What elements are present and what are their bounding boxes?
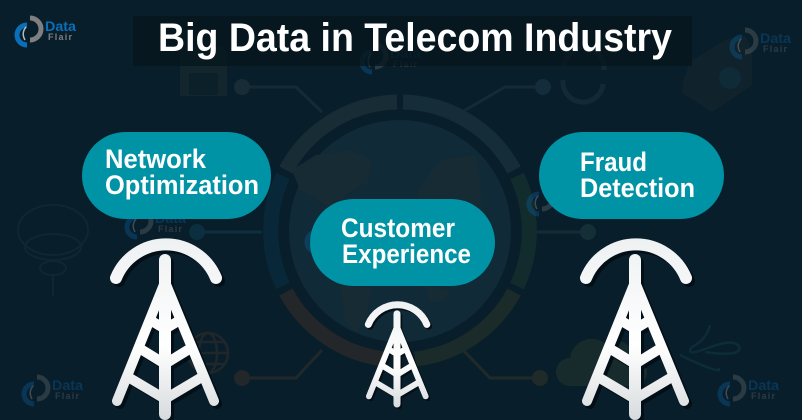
ghost icon: globe <box>188 333 228 373</box>
pill: Customer Experience <box>310 199 495 286</box>
ghost icon: telephone <box>682 35 752 112</box>
title band: Big Data in Telecom Industry <box>158 16 673 60</box>
pill: Fraud Detection: Detection <box>580 173 695 203</box>
ghost icon: floppy disk <box>180 47 227 96</box>
logo <box>17 18 76 45</box>
icon: center signal tower <box>368 305 429 406</box>
pill: Network Optimization: Optimization <box>105 170 259 200</box>
pill: Fraud Detection: Fraud <box>580 147 647 177</box>
pill: Fraud Detection <box>539 132 724 219</box>
central ring and globe <box>271 102 529 359</box>
background connector lines and nodes <box>189 79 596 386</box>
ghost icon: chandelier <box>18 205 88 296</box>
ghost icon: cable <box>680 325 739 370</box>
ghost icon: cloud <box>556 339 647 386</box>
pill: Customer Experience: Experience <box>342 239 471 269</box>
pill: Network Optimization <box>82 132 271 219</box>
icon: right signal tower <box>586 244 689 417</box>
world map silhouette <box>292 150 482 332</box>
ghost icon: refresh arrows <box>563 48 604 102</box>
pill: Network Optimization: Network <box>105 144 207 174</box>
pill: Customer Experience: Customer <box>341 213 455 243</box>
icon: left signal tower <box>116 244 219 417</box>
